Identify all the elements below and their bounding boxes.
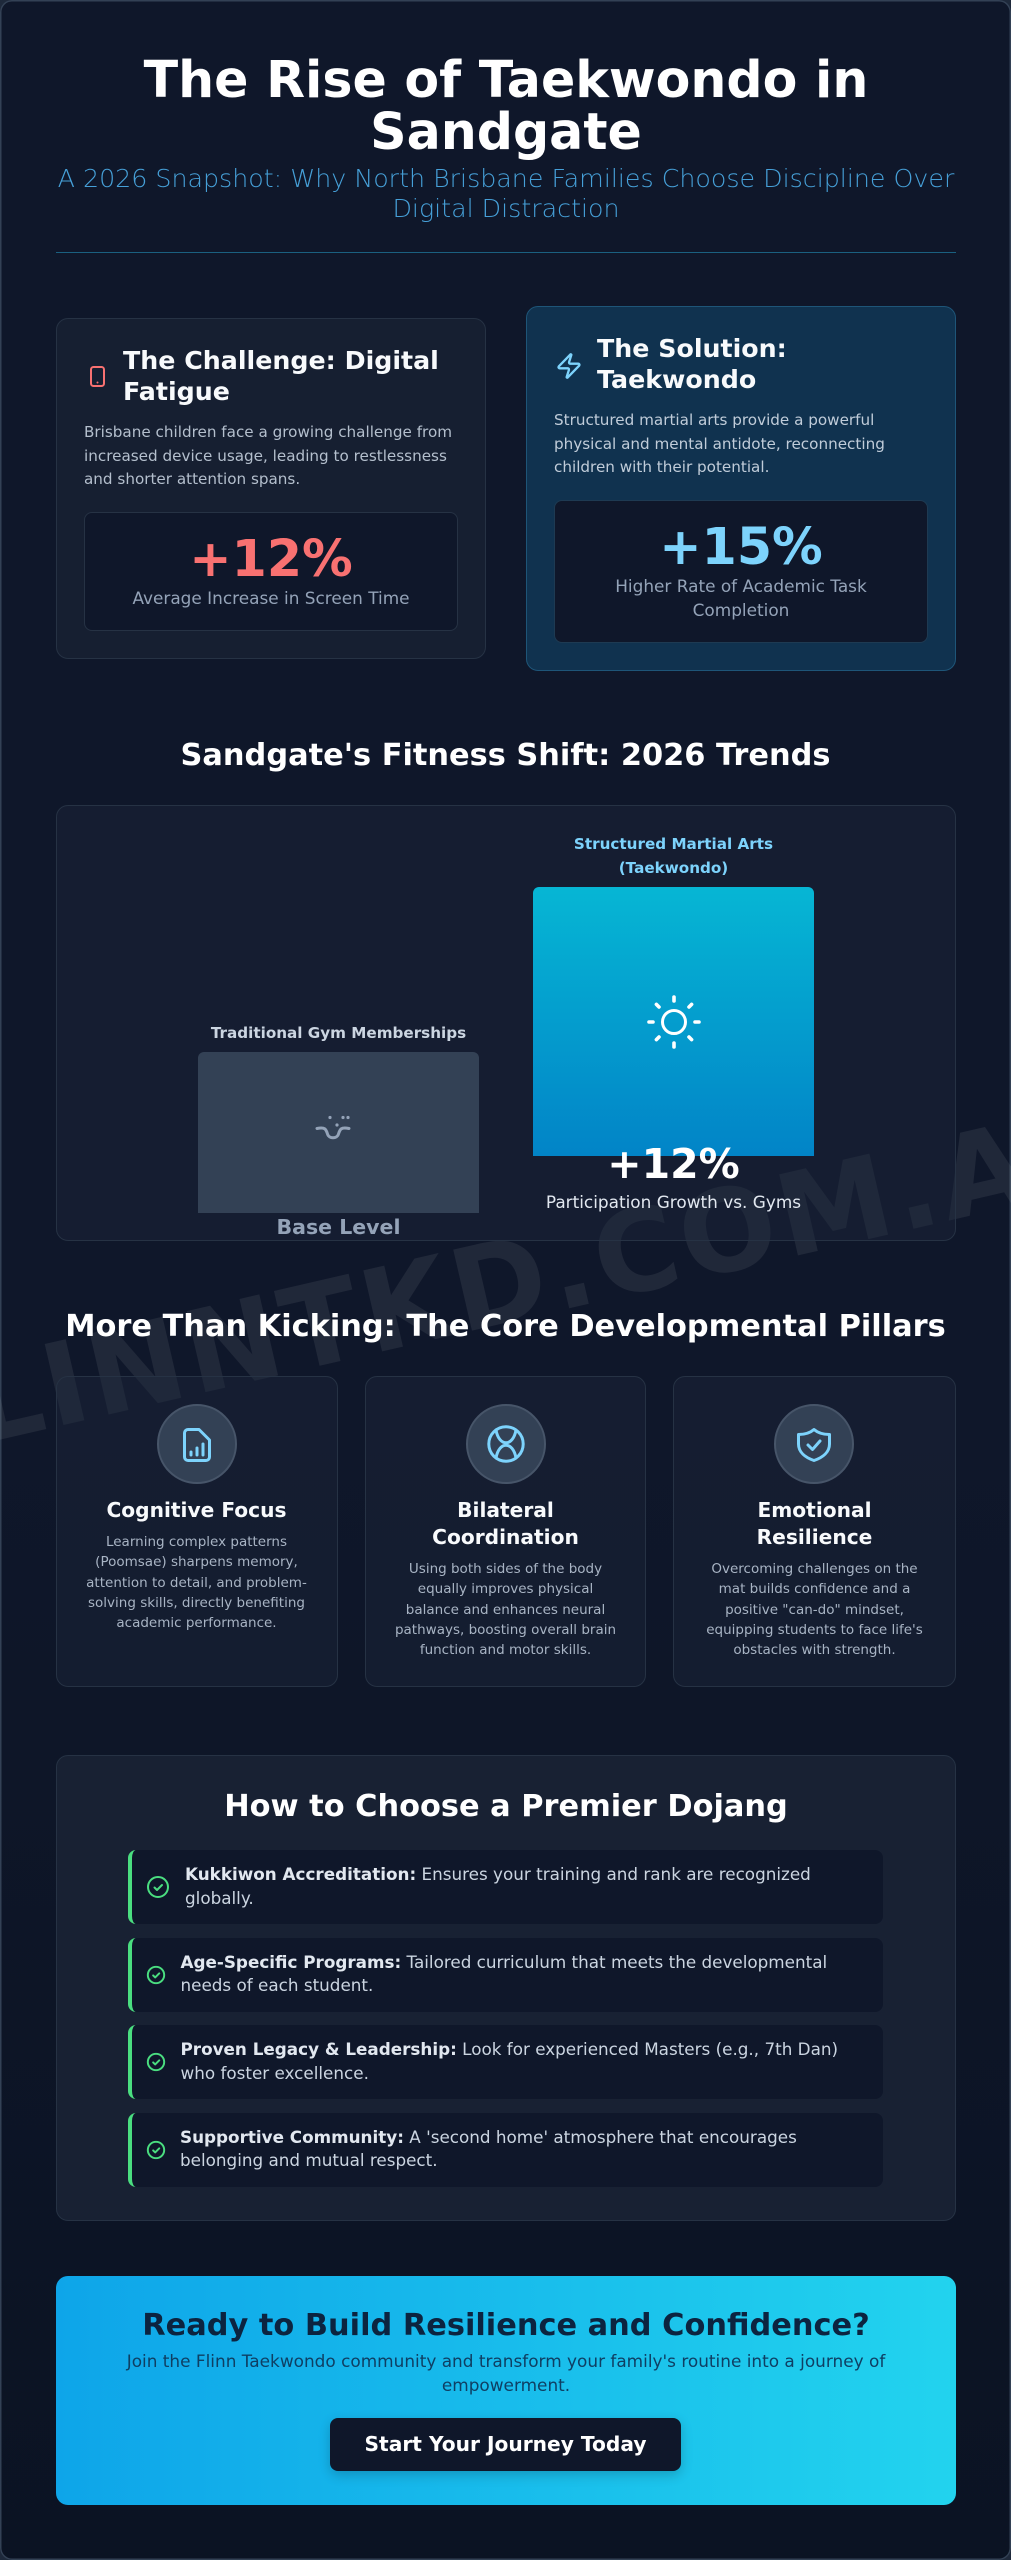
stat box: screen time: [84, 512, 458, 631]
stat label: Average Increase in Screen Time: [132, 588, 410, 608]
title: Sandgate: [370, 102, 642, 161]
pillar title: Coordination: [432, 1525, 579, 1549]
pillar title: Cognitive Focus: [106, 1498, 287, 1522]
taekwondo bar: [533, 887, 814, 1156]
item text: Supportive Community: A 'second home' atmosphere that encourages: [180, 2126, 797, 2146]
challenge text: Brisbane children face a growing challenge from: [84, 423, 452, 441]
pillar text: Learning complex patterns: [106, 1534, 287, 1550]
item text: [185, 1864, 811, 1908]
panel: bilateral coordination: [365, 1376, 646, 1687]
checklist item: accreditation: [128, 1850, 883, 1924]
solution heading: [597, 334, 787, 394]
taekwondo value: +12%: [607, 1140, 740, 1188]
solution text: [554, 411, 885, 476]
panel: dojang checklist: [56, 1755, 956, 2221]
gym bar: [198, 1052, 479, 1213]
pillar text: [86, 1534, 307, 1631]
panel: call to action: [56, 2276, 956, 2505]
stat box: academic task: [554, 500, 928, 643]
pillar text: solving skills, directly benefiting: [88, 1595, 305, 1611]
checklist item: community: [128, 2112, 883, 2186]
panel: cognitive focus: [56, 1376, 338, 1687]
solution heading: The Solution:: [597, 334, 787, 363]
item text: [180, 1952, 827, 1995]
challenge text: increased device usage, leading to restlessness: [84, 446, 447, 464]
pillar text: balance and enhances neural: [406, 1602, 605, 1618]
icon: crossed circle: [466, 1404, 546, 1484]
icon: check: [146, 1966, 166, 1984]
checklist item: programs: [128, 1938, 883, 2012]
pillar text: pathways, boosting overall brain: [395, 1622, 616, 1638]
icon: check: [147, 1876, 169, 1898]
pillar text: attention to detail, and problem-: [86, 1575, 307, 1591]
challenge heading: The Challenge: Digital: [123, 346, 439, 375]
item text: Age-Specific Programs: Tailored curriculum that meets the developmental: [180, 1952, 827, 1972]
icon: sun: [647, 995, 701, 1049]
pillar title: [757, 1498, 872, 1549]
stat value: +15%: [659, 517, 823, 576]
solution text: Structured martial arts provide a powerful: [554, 411, 874, 429]
challenge heading: Fatigue: [123, 377, 230, 406]
subtitle: Digital Distraction: [392, 194, 620, 223]
item text: belonging and mutual respect.: [180, 2150, 438, 2170]
cta text: empowerment.: [442, 2375, 570, 2395]
pillar text: positive "can-do" mindset,: [725, 1602, 904, 1618]
icon: smartphone: [90, 366, 105, 387]
stat label: Higher Rate of Academic Task: [615, 576, 867, 596]
pillar text: obstacles with strength.: [733, 1642, 896, 1658]
taekwondo column: [533, 835, 814, 1212]
cta text: [126, 2351, 886, 2395]
stat label: [615, 576, 867, 620]
pillar title: Emotional: [757, 1498, 872, 1522]
pillar title: [432, 1498, 579, 1549]
item text: [180, 2126, 797, 2170]
panel: challenge: [56, 318, 486, 659]
subtitle: A 2026 Snapshot: Why North Brisbane Families Choose Discipline Over: [58, 164, 954, 193]
solution text: physical and mental antidote, reconnecting: [554, 434, 885, 452]
taekwondo label: [574, 835, 773, 877]
challenge heading: [123, 346, 439, 406]
icon: check: [146, 2052, 166, 2072]
solution heading: Taekwondo: [597, 365, 756, 394]
pillar text: [395, 1561, 616, 1658]
item text: needs of each student.: [180, 1975, 373, 1995]
solution text: children with their potential.: [554, 458, 769, 476]
cta heading: Ready to Build Resilience and Confidence?: [142, 2308, 870, 2343]
pillar text: mat builds confidence and a: [719, 1581, 910, 1597]
icon: check: [146, 2140, 166, 2160]
item text: [180, 2039, 838, 2083]
item text: who foster excellence.: [180, 2063, 369, 2083]
icon: shield check: [774, 1404, 854, 1484]
header: [56, 54, 956, 253]
item text: Kukkiwon Accreditation: Ensures your training and rank are recognized: [185, 1864, 811, 1884]
challenge text: and shorter attention spans.: [84, 470, 300, 488]
panel: emotional resilience: [673, 1376, 956, 1687]
subtitle: [58, 164, 954, 223]
pillar title: Bilateral: [457, 1498, 554, 1522]
pillar text: (Poomsae) sharpens memory,: [95, 1554, 298, 1570]
checklist item: legacy: [128, 2025, 883, 2099]
pillar text: equipping students to face life's: [706, 1622, 923, 1638]
cta text: Join the Flinn Taekwondo community and transform your family's routine into a journey of: [127, 2351, 885, 2371]
icon: lightning bolt: [557, 353, 581, 379]
pillar text: function and motor skills.: [420, 1642, 591, 1658]
icon: document chart: [157, 1404, 237, 1484]
pillar text: academic performance.: [116, 1615, 277, 1631]
pillar text: Overcoming challenges on the: [711, 1561, 918, 1577]
gym label: Traditional Gym Memberships: [211, 1024, 466, 1042]
title: The Rise of Taekwondo in: [144, 50, 868, 109]
pillar text: equally improves physical: [418, 1581, 593, 1597]
gym column: [198, 1024, 479, 1239]
panel: bar chart: [56, 805, 956, 1241]
challenge text: [84, 423, 452, 488]
taekwondo label: (Taekwondo): [619, 859, 728, 877]
pillar title: Resilience: [757, 1525, 872, 1549]
title: [144, 50, 868, 161]
heading: fitness shift: Sandgate's Fitness Shift: 2026 Trends: [181, 738, 830, 772]
stat value: +12%: [189, 529, 353, 588]
item text: globally.: [185, 1888, 254, 1908]
item text: Proven Legacy & Leadership: Look for experienced Masters (e.g., 7th Dan): [180, 2039, 838, 2059]
heading: pillars: More Than Kicking: The Core Developmental Pillars: [65, 1308, 946, 1344]
taekwondo label: Structured Martial Arts: [574, 835, 773, 853]
taekwondo caption: Participation Growth vs. Gyms: [546, 1192, 801, 1212]
pillar text: [706, 1561, 923, 1658]
pillar text: Using both sides of the body: [409, 1561, 602, 1577]
gym value: Base Level: [277, 1215, 400, 1239]
panel: solution: [526, 306, 956, 671]
stat label: Completion: [693, 600, 789, 620]
icon: gym wave: [316, 1116, 350, 1140]
cta button: [330, 2418, 681, 2470]
checklist heading: How to Choose a Premier Dojang: [224, 1789, 788, 1824]
button label: Start Your Journey Today: [365, 2432, 646, 2456]
